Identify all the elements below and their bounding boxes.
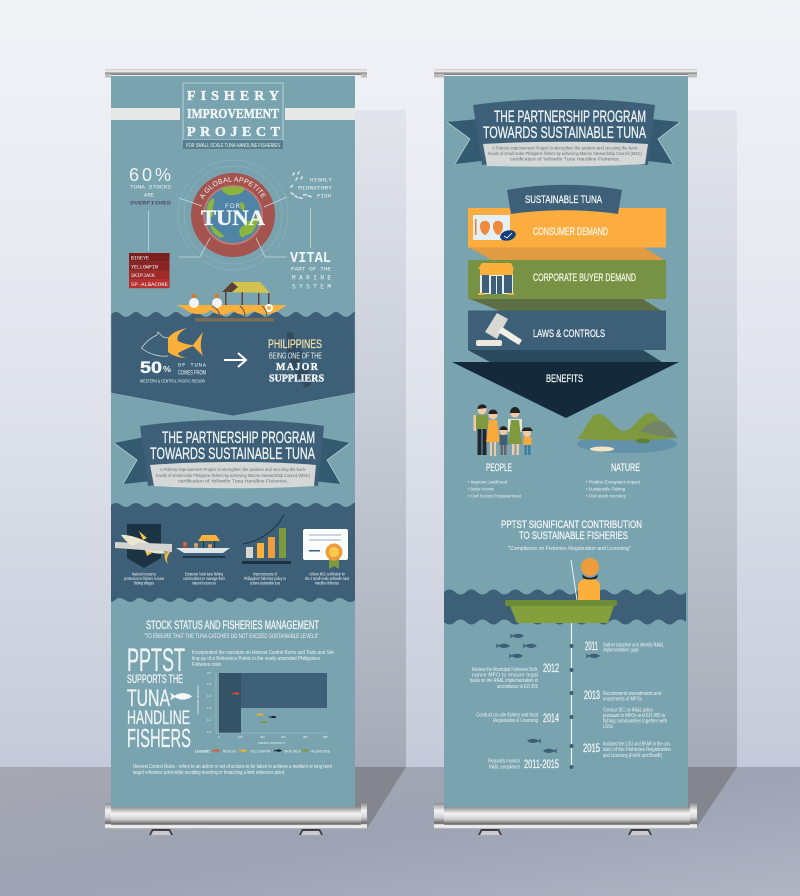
banner top bar [105, 69, 367, 78]
text: harvest control description [192, 650, 335, 668]
icon: storefront [478, 263, 514, 295]
band: consumer demand: CONSUMER DEMAND [533, 226, 608, 238]
callout: philippines major suppliers: SUPPLIERS [269, 374, 324, 384]
arrow [224, 353, 246, 367]
block: PPTST supports the tuna handline fishers [127, 642, 192, 753]
band: corporate buyer demand: CORPORATE BUYER DEMAND [533, 272, 636, 284]
timeline entry: 2013: LGUs [603, 724, 613, 730]
callout: philippines major suppliers: BEING ONE OF THE [269, 352, 322, 360]
benefits: people: • Civil Society Empowerment [468, 494, 522, 500]
timeline entry: 2015: and Licensing (FishR and BoatR) [603, 753, 662, 759]
ribbon heading: partnership program: A Fishery Improvement Project to strengthen the position and securing the liveli- [492, 146, 639, 150]
text: harvest control rules definition: target reference point while avoiding reaching or breaching a limit reference point. [133, 770, 285, 776]
heading: stock status: "TO ENSURE THAT THE TUNA CATCHES DO NOT EXCEED SUSTAINABLE LEVELS" [144, 634, 319, 640]
chart: stock status plot: 500 [323, 735, 328, 739]
timeline entry: 2013: 2013 [584, 688, 600, 702]
banner base [105, 803, 367, 835]
timeline entry: 2012: accordance to EO 305 [497, 684, 538, 690]
callout: 60% overfished: TUNA STOCKS [130, 184, 172, 190]
banner: left [105, 69, 367, 835]
goal text: MSC certification: Achieve MSC certification for [309, 572, 345, 576]
text: harvest control description: Fisheries code [192, 662, 221, 668]
callout: vital part of the marine system: MARINE [292, 274, 331, 282]
statistic: 50 percent of tuna: OF TUNA [178, 362, 207, 368]
timeline entry: 2011-2015 [488, 757, 559, 771]
block: PPTST supports the tuna handline fishers: SUPPORTS THE [127, 672, 183, 686]
timeline entry: 2015: duct of the Fisheries Registration [603, 747, 671, 753]
icon: rising bar chart [242, 515, 291, 564]
goal text: empower fishing communities: communities to manage their [183, 576, 225, 581]
chart: stock status plot: 100 [238, 735, 243, 739]
globe graphic: a global appetite for tuna: FOR [225, 204, 241, 210]
timeline entry: 2015 [583, 741, 671, 759]
callout: 60% overfished: ARE [144, 192, 155, 198]
icon: shield and ribbon with tuna [115, 524, 172, 568]
heading: stock status: STOCK STATUS AND FISHERIES MANAGEMENT [146, 620, 319, 632]
ribbon heading: partnership program: THE PARTNERSHIP PROGRAM [494, 108, 646, 126]
timeline entry: 2012: nance MFO to ensure legal [472, 672, 538, 678]
chart legend: BIGEYE [223, 750, 237, 754]
title block: FISHERY [187, 89, 279, 104]
banner: right [434, 69, 697, 835]
callout: highly migratory fish: MIGRATORY [298, 184, 333, 192]
timeline entry: 2011-2015: Regularly monitor [488, 758, 520, 764]
statistic: 50 percent of tuna: WESTERN & CENTRAL PACIFIC REGION [140, 378, 205, 384]
illustration: nature landscape [577, 413, 677, 453]
chart legend [195, 749, 331, 754]
benefits: nature: • Sustainable Fishing [586, 486, 625, 492]
callout: 60% overfished: OVERFISHED [130, 200, 172, 206]
band: consumer demand [468, 208, 666, 260]
benefits: people [468, 462, 522, 500]
ribbon heading: partnership program: A Fishery Improvement Project to strengthen the position and securing the liveli- [160, 467, 307, 472]
chart legend: SKIPJACK [284, 750, 302, 754]
dark panel: programme goals [111, 503, 355, 602]
species list [129, 253, 170, 288]
timeline entry: 2013: pursuant to MFOs and EO 305 to [603, 713, 665, 719]
callout: vital part of the marine system [290, 250, 332, 290]
title block [111, 83, 355, 149]
chart legend: LEGEND: [195, 750, 211, 754]
chart legend: YELLOWFIN [250, 750, 271, 754]
chart: stock status plot: 1.8 [207, 682, 211, 686]
timeline entry: 2014: Conduct on-site fishers and boat [476, 712, 539, 718]
chart: stock status plot: 2.0 [207, 671, 211, 675]
text: harvest control description: ting-up of a Reference Points in the newly amended Philippines [192, 656, 320, 662]
timeline entry: 2011: Gather baseline and identify RA&L [603, 642, 664, 648]
heading: PPTST significant contribution: "Compliance on Fisheries Registration and Licensing" [508, 546, 631, 552]
chart: stock status plot: SPAWNING BIOMASS [196, 685, 200, 714]
dark sea panel with chevron [111, 312, 355, 416]
timeline entry: 2013 [584, 688, 667, 730]
goal text: empower fishing communities: natural resources [192, 580, 217, 586]
heading: PPTST significant contribution [501, 519, 642, 552]
chart: stock status plot: 300 [281, 735, 286, 739]
callout: highly migratory fish: FISH [317, 192, 331, 200]
ribbon heading: partnership program: certification of Yellowfin Tuna Handline Fisheries. [510, 156, 620, 162]
species list: YELLOWFIN [131, 264, 158, 270]
illustration: fisher in boat on waves [444, 558, 686, 624]
title block: FOR SMALL SCALE TUNA HANDLINE FISHERIES [186, 143, 280, 149]
goal text: MSC certification: the 2 small-scale yellowfin tuna [305, 576, 349, 581]
block: PPTST supports the tuna handline fishers: FISHERS [127, 723, 191, 753]
chart: stock status plot: 0 [218, 735, 220, 739]
benefits: nature: NATURE [611, 462, 640, 474]
timeline entry: 2014: 2014 [543, 711, 559, 725]
timeline entry: 2013: Conduct IEC on RA&L policy [603, 708, 653, 714]
banner top bar [434, 69, 697, 78]
goal text: improvements of policy: Improvements of [253, 572, 278, 576]
goal text: MSC certification [305, 572, 349, 586]
icon: boat with fishers [176, 535, 230, 558]
band: laws and controls [468, 310, 666, 362]
goal text: natural resources: fishing villages [134, 580, 155, 586]
callout: vital part of the marine system: SYSTEM [292, 284, 331, 290]
callout: highly migratory fish: HIGHLY [310, 176, 333, 184]
chart: stock status plot: 1.2 [207, 718, 211, 722]
globe graphic: a global appetite for tuna: TUNA [201, 205, 265, 230]
timeline entry: 2012: basis on the RA&L implementation in [470, 678, 538, 684]
text: harvest control description: Incorporated the concepts on Harvest Control Rules and Tools and Set- [192, 650, 335, 656]
goal text: improvements of policy: achieve sustainable tuna [250, 580, 280, 586]
chart legend: ALBACORE [311, 750, 331, 754]
tab: sustainable tuna: SUSTAINABLE TUNA [525, 194, 602, 206]
timeline entry: 2012: 2012 [543, 661, 559, 675]
statistic: 50 percent of tuna [140, 358, 207, 384]
panel: sustainable tuna drivers [468, 185, 666, 362]
ribbon heading: partnership program: certification of Yellowfin Tuna Handline Fisheries. [178, 478, 288, 484]
timeline entry: 2011-2015: RA&L compliance [489, 764, 520, 770]
callout: philippines major suppliers: MAJOR [276, 362, 319, 373]
title block: IMPROVEMENT [187, 107, 280, 122]
ribbon heading: partnership program: hoods of small-scale Philippine fishers by achieving Marine Stewardship Council (MSC) [156, 473, 311, 478]
chart: stock status plot: 1.4 [207, 706, 211, 710]
timeline axis [570, 623, 574, 769]
chart: stock status plot: 1.0 [207, 730, 211, 734]
callout: vital part of the marine system: VITAL [290, 250, 331, 267]
triangle: benefits: BENEFITS [546, 373, 583, 385]
tab: sustainable tuna [507, 185, 622, 214]
icon: gavel [476, 313, 522, 346]
text: harvest control rules definition [133, 764, 332, 776]
benefits: people: • Improve Livelihood [468, 480, 507, 486]
banner background panel [444, 76, 688, 808]
benefits: nature: • Positive Ecosystem Impact [586, 480, 641, 486]
callout: philippines major suppliers: PHILIPPINES [268, 339, 322, 351]
goal text: improvements of policy: Philippines' fisheries policy to [244, 576, 286, 581]
ribbon heading: partnership program: TOWARDS SUSTAINABLE TUNA [150, 445, 315, 463]
species list: SKIPJACK [131, 273, 155, 279]
chart: stock status plot: 1.6 [207, 694, 211, 698]
benefits: people: • Better Income [468, 486, 494, 492]
goal text: improvements of policy [244, 572, 286, 586]
goal text: empower fishing communities [183, 572, 225, 586]
statistic: 50 percent of tuna: % [163, 365, 171, 374]
timeline entry: 2011 [585, 639, 664, 654]
fish school [496, 633, 600, 753]
banner base [434, 803, 697, 835]
species list: SP-ALBACORE [131, 282, 168, 288]
icon: fishing boat [177, 282, 287, 322]
block: PPTST supports the tuna handline fishers: TUNA [127, 685, 170, 712]
callout: 60% overfished [129, 165, 172, 251]
chart: stock status plot: FISHING MORTALITY [258, 741, 286, 745]
timeline entry: 2012 [470, 661, 559, 690]
timeline entry: 2011: implementation gaps [603, 648, 639, 654]
illustration: family [474, 404, 533, 456]
banner background panel [111, 76, 355, 808]
timeline entry: 2014: Registration & Licensing [493, 718, 538, 724]
timeline entry: 2013: fishing communities together with [603, 718, 667, 724]
benefits: people: PEOPLE [486, 462, 512, 474]
goal text: empower fishing communities: Empower local tuna fishing [185, 572, 223, 576]
title block: PROJECT [187, 125, 281, 140]
heading: PPTST significant contribution: PPTST SIGNIFICANT CONTRIBUTION [501, 519, 642, 531]
chart: stock status plot [196, 671, 328, 745]
goal text: natural resources [124, 572, 164, 586]
icon: tuna with 50 percent highlighted [142, 328, 203, 358]
globe graphic: a global appetite for tuna [178, 160, 288, 270]
timeline entry: 2013: Recommend amendments and [603, 691, 661, 697]
icon: seafood label with MSC badge [473, 215, 517, 242]
benefits: nature [586, 462, 641, 500]
chart: stock status plot: 200 [260, 735, 265, 739]
ribbon heading: partnership program: hoods of small-scale Philippine fishers by achieving Marine Stewardship Council (MSC) [488, 151, 643, 156]
goal text: natural resources: Natural resource [132, 572, 156, 576]
callout: highly migratory fish [290, 171, 333, 200]
timeline entry: 2014 [476, 711, 559, 725]
block: PPTST supports the tuna handline fishers: PPTST [127, 642, 185, 678]
goal text: MSC certification: handline fisheries [315, 580, 340, 586]
text: harvest control rules definition: Harvest Control Rules - refers to an action or set of actions to be taken to achieve a medium or long term [133, 764, 332, 770]
band: corporate buyer demand [468, 260, 666, 311]
globe graphic: a global appetite for tuna: A GLOBAL APPETITE [200, 176, 266, 200]
timeline entry: 2012: Review the Municipal Fisheries Ordi- [472, 667, 538, 673]
callout: philippines major suppliers [268, 332, 324, 388]
block: PPTST supports the tuna handline fishers: HANDLINE [127, 708, 190, 729]
benefits: nature: • Fish stock recovery [586, 494, 627, 500]
timeline entry: 2015: 2015 [583, 741, 600, 755]
timeline entry: 2011-2015: 2011-2015 [524, 757, 559, 771]
timeline entry: 2011: 2011 [585, 639, 598, 653]
ribbon heading: partnership program: TOWARDS SUSTAINABLE TUNA [483, 124, 646, 142]
statistic: 50 percent of tuna: COMES FROM [178, 370, 206, 376]
heading: PPTST significant contribution: TO SUSTAINABLE FISHERIES [519, 530, 628, 542]
species list: BIGEYE [131, 256, 149, 262]
connector lines [179, 197, 310, 257]
statistic: 50 percent of tuna: 50 [140, 358, 162, 377]
ribbon heading: partnership program [447, 99, 680, 167]
chart: stock status plot: 400 [303, 735, 308, 739]
ribbon heading: partnership program: THE PARTNERSHIP PROGRAM [162, 429, 315, 447]
timeline entry: 2013: enactments of MFOs [603, 696, 642, 702]
heading: stock status [144, 620, 319, 640]
icon: certificate with rosette [303, 529, 348, 569]
band: laws and controls: LAWS & CONTROLS [533, 328, 605, 340]
callout: vital part of the marine system: PART OF THE [291, 266, 332, 272]
callout: 60% overfished: 60% [129, 165, 171, 185]
ribbon heading: partnership program [114, 420, 350, 488]
triangle: benefits [452, 362, 679, 418]
timeline entry: 2015: Assisted the LGU and BFAR in the con- [603, 742, 671, 748]
goal text: natural resources: protection to fishers in tuna [124, 576, 164, 581]
